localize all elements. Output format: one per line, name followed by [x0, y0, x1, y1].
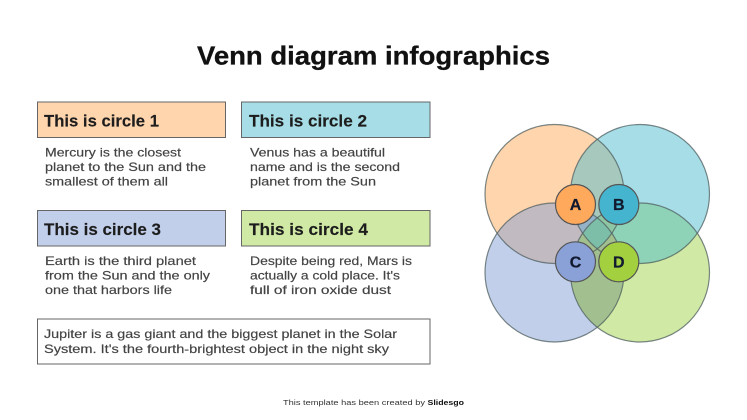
circle 1 orange	[485, 124, 624, 264]
panel: circle 1	[38, 102, 226, 188]
badge B	[599, 184, 639, 224]
footer credit: Slidesgo	[428, 398, 464, 407]
text: circle 1 description: Mercury is the closest	[45, 146, 182, 160]
text: circle 3 description: Earth is the third planet	[45, 254, 197, 268]
circle outlines	[485, 124, 710, 342]
text: circle 1 description: planet to the Sun and the	[45, 160, 206, 174]
badge C	[556, 242, 596, 282]
text: circle 4 description: full of iron oxide dust	[250, 283, 392, 297]
footer credit: This template has been created by	[283, 398, 425, 407]
panel: Jupiter note	[38, 319, 430, 364]
badge A: A	[570, 197, 582, 214]
panel: circle 3	[38, 210, 226, 297]
badge D: D	[613, 254, 625, 272]
circle 4 green	[570, 203, 710, 342]
overlap: all four circles	[584, 218, 611, 248]
badge C: C	[570, 254, 582, 272]
heading box: circle 4	[242, 210, 430, 246]
text: circle 3 description: from the Sun and the only	[45, 268, 210, 282]
badge B: B	[613, 197, 625, 214]
badge D	[599, 242, 639, 282]
heading box: circle 3	[38, 210, 226, 246]
heading box: circle 2: This is circle 2	[249, 112, 367, 130]
heading box: circle 4: This is circle 4	[249, 220, 369, 239]
heading box: circle 3: This is circle 3	[44, 220, 161, 239]
heading box: circle 1	[38, 102, 226, 138]
text: circle 2 description: planet from the Sun	[250, 174, 376, 188]
circle 3 lilac	[485, 203, 624, 342]
overlap: circles 3 and 4	[572, 234, 623, 326]
text: circle 1 description: smallest of them all	[45, 174, 168, 188]
badge A	[556, 184, 596, 224]
panel: Jupiter note: System. It's the fourth-brightest object in the night sky	[44, 342, 389, 356]
circle 2 blue	[570, 124, 710, 264]
text: circle 2 description: name and is the second	[250, 160, 400, 174]
text: circle 1 description	[45, 146, 206, 188]
text: circle 2 description: Venus has a beautiful	[250, 146, 385, 160]
panel: circle 2	[242, 102, 430, 188]
venn diagram	[485, 124, 710, 342]
heading box: circle 2	[242, 102, 430, 138]
panel: circle 4	[242, 210, 430, 297]
text: circle 3 description: one that harbors life	[45, 283, 172, 297]
heading box: circle 1: This is circle 1	[44, 112, 159, 130]
text: circle 4 description: actually a cold place. It's	[250, 268, 400, 282]
text: circle 3 description	[45, 254, 210, 297]
text: circle 4 description	[250, 254, 412, 297]
text: circle 2 description	[250, 146, 400, 188]
text: circle 4 description: Despite being red, Mars is	[250, 254, 412, 268]
panel: Jupiter note: Jupiter is a gas giant and the biggest planet in the Solar	[44, 327, 397, 341]
title: Venn diagram infographics	[197, 40, 550, 70]
